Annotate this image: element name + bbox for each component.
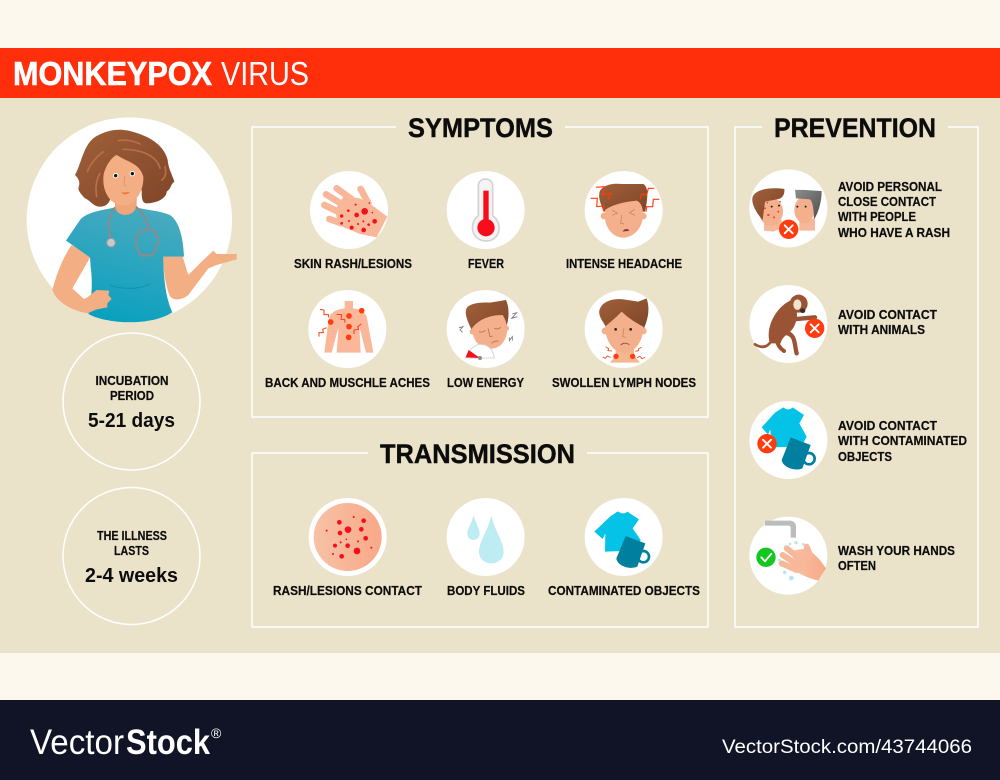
label: body fluids: BODY FLUIDS: [447, 584, 525, 598]
text: avoid animals: AVOID CONTACT: [838, 308, 937, 322]
label: fever: FEVER: [468, 257, 504, 271]
heading: symptoms: SYMPTOMS: [408, 113, 553, 143]
icon: rash contact: [309, 498, 387, 576]
stat: incubation period: [63, 333, 200, 470]
hand on hip: [78, 290, 112, 313]
icon: swollen lymph nodes: [585, 290, 663, 368]
text: wash hands: [838, 544, 955, 573]
label: rash contact: RASH/LESIONS CONTACT: [273, 584, 422, 598]
label: swollen lymph nodes: SWOLLEN LYMPH NODES: [552, 376, 696, 390]
footer logo: ®: [211, 725, 222, 741]
icon: thermometer: [447, 171, 525, 249]
text: avoid contaminated objects: WITH CONTAMINATED: [838, 434, 967, 448]
left arm: [52, 245, 107, 313]
icon: headache: [585, 171, 663, 249]
footer bar: [0, 700, 1000, 780]
stat: incubation period: PERIOD: [110, 389, 154, 403]
heading: transmission: TRANSMISSION: [380, 439, 575, 469]
label: back and muscle aches: BACK AND MUSCHLE ACHES: [265, 376, 430, 390]
text: avoid close contact: WITH PEOPLE: [838, 210, 916, 224]
right arm: [163, 251, 237, 299]
stat: incubation period: 5-21 days: [88, 410, 175, 432]
icon: wash hands: [749, 517, 827, 595]
text: wash hands: WASH YOUR HANDS: [838, 544, 955, 558]
icon: back and muscle aches: [308, 290, 386, 368]
text: wash hands: OFTEN: [838, 559, 876, 573]
label: contaminated objects: CONTAMINATED OBJECTS: [548, 584, 700, 598]
face: [103, 155, 143, 206]
title banner: [0, 48, 1000, 98]
stat: illness duration: LASTS: [114, 544, 149, 558]
heading: prevention: PREVENTION: [774, 113, 936, 143]
icon: avoid contaminated objects: [749, 401, 827, 479]
label: low energy: LOW ENERGY: [447, 376, 525, 390]
text: avoid close contact: [838, 180, 950, 240]
footer logo: [30, 723, 222, 762]
text: avoid animals: [838, 308, 937, 337]
stethoscope: [109, 207, 158, 256]
footer logo: Stock: [126, 723, 210, 762]
icon: avoid close contact: [749, 169, 827, 247]
icon: skin rash: [310, 171, 388, 249]
footer logo: Vector: [30, 723, 124, 762]
icon: contaminated objects: [585, 498, 663, 576]
stat: illness duration: [63, 488, 200, 624]
panel: transmission: [252, 439, 708, 627]
text: avoid contaminated objects: OBJECTS: [838, 450, 892, 464]
beige content panel: [0, 98, 1000, 653]
panel: prevention: [735, 113, 978, 627]
icon: low energy: [447, 290, 525, 368]
text: avoid close contact: CLOSE CONTACT: [838, 195, 936, 209]
icon: avoid animals: [749, 285, 827, 363]
panel: symptoms: [252, 113, 708, 417]
footer image id: VectorStock.com/43744066: [722, 736, 972, 758]
neck: [115, 197, 137, 215]
title banner: VIRUS: [221, 55, 309, 92]
label: headache: INTENSE HEADACHE: [566, 257, 682, 271]
label: skin rash: SKIN RASH/LESIONS: [294, 257, 412, 271]
text: avoid close contact: WHO HAVE A RASH: [838, 226, 950, 240]
stat: incubation period: INCUBATION: [96, 374, 168, 388]
text: avoid animals: WITH ANIMALS: [838, 323, 925, 337]
stat: illness duration: THE ILLNESS: [97, 529, 167, 543]
title banner: MONKEYPOX: [13, 55, 212, 92]
text: avoid close contact: AVOID PERSONAL: [838, 180, 942, 194]
hair: [75, 130, 174, 207]
shirt: [66, 207, 184, 322]
text: avoid contaminated objects: [838, 419, 967, 464]
text: avoid contaminated objects: AVOID CONTACT: [838, 419, 937, 433]
stat: illness duration: 2-4 weeks: [85, 565, 178, 587]
doctor illustration: [27, 117, 237, 323]
icon: body fluids: [447, 498, 525, 576]
